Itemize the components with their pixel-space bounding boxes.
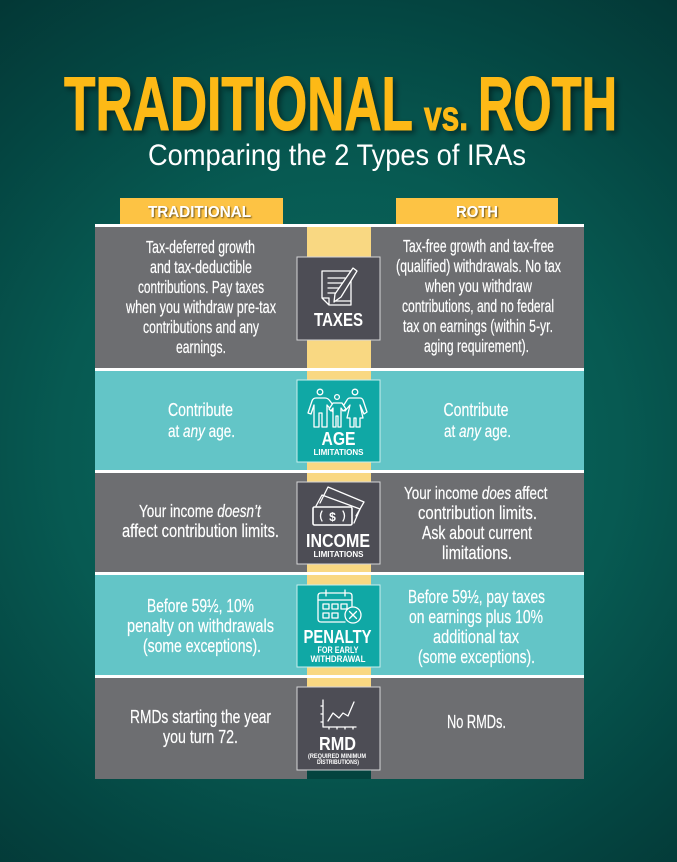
rmd: roth text: No RMDs.	[447, 712, 506, 732]
title: vs.	[424, 92, 468, 139]
income: traditional text: Your income doesn’t	[139, 502, 261, 522]
age badge: LIMITATIONS	[314, 448, 364, 457]
taxes: roth text: (qualified) withdrawals. No tax	[396, 256, 561, 276]
comparison table rows	[95, 224, 584, 779]
column header: roth	[396, 198, 558, 224]
age: traditional text	[168, 400, 235, 442]
rmd: traditional text	[130, 707, 271, 747]
taxes badge: TAXES	[314, 310, 363, 330]
taxes: traditional text: contributions. Pay taxes	[138, 277, 264, 297]
age: roth text: at any age.	[444, 422, 511, 442]
rmd badge: RMD	[319, 734, 356, 754]
title: TRADITIONAL	[64, 62, 413, 147]
penalty badge	[297, 585, 380, 667]
rmd badge: (REQUIRED MINIMUM	[308, 754, 366, 760]
income: traditional text	[122, 502, 279, 541]
taxes: roth text: Tax-free growth and tax-free	[403, 236, 554, 256]
taxes: traditional text: when you withdraw pre-tax	[125, 297, 276, 317]
taxes badge	[297, 257, 380, 340]
taxes: traditional text: Tax-deferred growth	[146, 237, 255, 257]
icon: calendar with x	[318, 590, 361, 623]
age: roth text	[444, 400, 511, 442]
taxes: roth text: tax on earnings (within 5-yr.	[403, 316, 553, 336]
taxes: roth text: contributions, and no federal	[402, 296, 554, 316]
penalty: traditional text: penalty on withdrawals	[127, 616, 274, 636]
income: roth text: contribution limits.	[418, 503, 537, 523]
penalty: traditional text: (some exceptions).	[143, 636, 261, 656]
penalty: roth text: (some exceptions).	[418, 647, 535, 667]
income: roth text	[404, 484, 548, 563]
icon: banknotes	[313, 487, 364, 525]
taxes: roth text: when you withdraw	[424, 276, 532, 296]
penalty: roth text: additional tax	[433, 627, 519, 647]
income badge: LIMITATIONS	[314, 550, 364, 559]
rmd badge: DISTRIBUTIONS)	[317, 760, 359, 766]
taxes: traditional text: contributions and any	[143, 317, 259, 337]
income: roth text: Ask about current	[422, 523, 532, 543]
column header: traditional: TRADITIONAL	[148, 204, 251, 221]
age badge: AGE	[322, 429, 356, 449]
taxes: traditional text: and tax-deductible	[150, 257, 252, 277]
subtitle: Comparing the 2 Types of IRAs	[148, 139, 526, 172]
income badge: INCOME	[306, 531, 370, 551]
taxes: roth text: aging requirement).	[424, 336, 529, 356]
penalty: roth text	[408, 587, 545, 667]
penalty: roth text: Before 59½, pay taxes	[408, 587, 545, 607]
penalty badge: WITHDRAWAL	[310, 654, 366, 664]
income: roth text: limitations.	[442, 543, 512, 563]
icon: family	[308, 389, 367, 427]
rmd: traditional text: RMDs starting the year	[130, 707, 271, 727]
column header: traditional	[120, 198, 283, 224]
income: traditional text: affect contribution limits.	[122, 521, 279, 541]
taxes: roth text	[396, 236, 561, 356]
column header: roth: ROTH	[456, 204, 498, 221]
taxes: traditional text	[125, 237, 276, 357]
age badge	[297, 380, 380, 462]
penalty badge: FOR EARLY	[318, 645, 358, 655]
dollar sign: $	[329, 510, 336, 524]
penalty: traditional text: Before 59½, 10%	[147, 596, 254, 616]
penalty: roth text: on earnings plus 10%	[409, 607, 543, 627]
age: traditional text: Contribute	[168, 400, 233, 420]
age: roth text: Contribute	[444, 400, 508, 420]
rmd: traditional text: you turn 72.	[163, 727, 238, 747]
penalty: traditional text	[127, 596, 274, 656]
penalty badge: PENALTY	[304, 627, 372, 647]
rmd badge	[297, 687, 380, 770]
income: roth text: Your income does affect	[404, 484, 548, 504]
income badge	[297, 482, 380, 564]
age: traditional text: at any age.	[168, 422, 235, 442]
icon: line chart	[321, 700, 356, 729]
taxes: traditional text: earnings.	[176, 337, 226, 357]
icon: document and pencil	[322, 268, 357, 305]
